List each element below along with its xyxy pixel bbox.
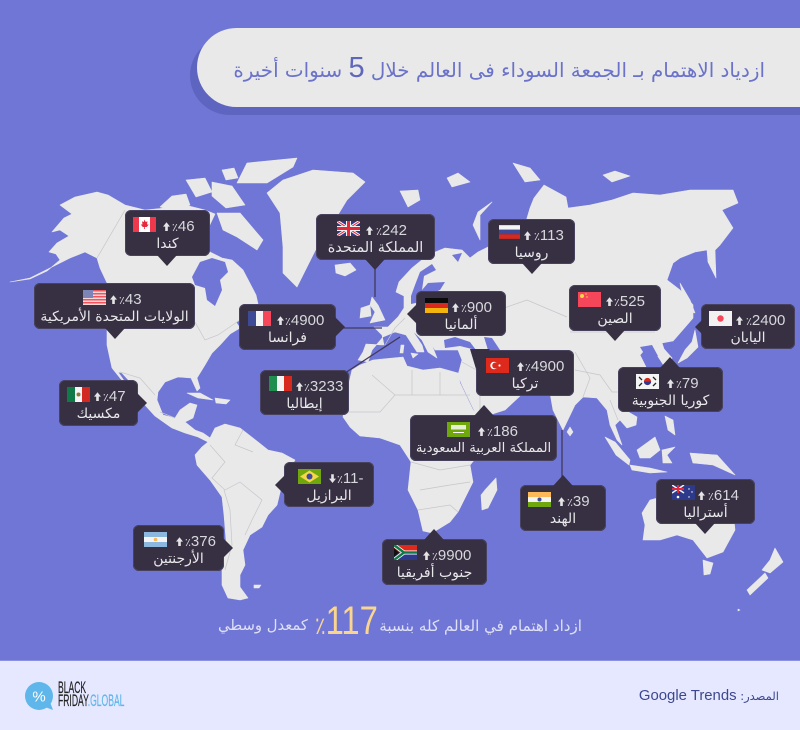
title bar (197, 28, 800, 107)
logo wordmark: FRIDAY.GLOBAL (58, 692, 124, 710)
Caspian Sea (484, 337, 500, 350)
flag: Russia (499, 225, 520, 239)
source text: المصدر: Google Trends (639, 688, 779, 704)
callout: Saudi Arabia: المملكة العربية السعودية (416, 441, 551, 456)
callout: Mexico (59, 380, 138, 426)
flag: Canada (133, 217, 156, 232)
flag: France (248, 311, 271, 326)
callout: Italy: إيطاليا (286, 396, 323, 412)
callout: United Kingdom (316, 214, 435, 260)
islands (187, 163, 783, 611)
callout: South Africa: جنوب أفريقيا (397, 565, 472, 581)
flag: Brazil (298, 469, 321, 484)
logo (25, 679, 124, 710)
flag: Germany (425, 298, 448, 313)
callout: USA (34, 283, 195, 329)
logo wordmark: BLACK (58, 679, 86, 697)
flag: Australia (672, 485, 695, 500)
flag: Turkey (486, 358, 509, 373)
flag: Japan (709, 311, 732, 326)
callout: South Africa (382, 539, 487, 585)
callout: Australia: ٪614 (708, 487, 739, 504)
summary text (218, 599, 582, 643)
callout: India: الهند (550, 511, 576, 527)
flag: United Kingdom (337, 221, 360, 236)
callout: United Kingdom: المملكة المتحدة (328, 240, 423, 256)
summary: first part: ازداد اهتمام في العالم كله بنسبة (379, 617, 582, 635)
callout: China: الصين (597, 311, 633, 327)
Greenland (267, 170, 365, 287)
flag: USA (83, 290, 106, 305)
header bar shadow (190, 36, 800, 115)
callout: Saudi Arabia (410, 415, 557, 461)
callout: Brazil: ٪11- (337, 470, 364, 487)
callout: Mexico: ٪47 (103, 388, 126, 405)
callout: South Korea: ٪79 (676, 375, 699, 392)
callout: France: ٪4900 (285, 312, 324, 329)
logo wordmark (58, 679, 124, 710)
flag: India (528, 492, 551, 507)
Hudson Bay (192, 258, 228, 306)
footer (0, 660, 800, 730)
callout: China: ٪525 (614, 293, 645, 310)
callout: Argentina: ٪376 (185, 533, 216, 550)
callout: Australia (656, 479, 755, 524)
flag: South Africa (394, 545, 417, 560)
callout: Mexico: مكسيك (77, 406, 120, 422)
Baltic Sea (411, 264, 445, 304)
callout: France: فرانسا (268, 330, 307, 346)
callout: Russia (488, 219, 575, 264)
South America (195, 424, 295, 600)
callout: Germany: ألمانيا (445, 317, 477, 333)
callout: Japan: ٪2400 (746, 312, 785, 329)
summary: last part: كمعدل وسطي (218, 617, 308, 634)
callout: Turkey: تركيا (512, 376, 538, 392)
callout: South Korea: كوريا الجنوبية (632, 393, 709, 409)
Africa (343, 357, 497, 533)
callout: Australia: أستراليا (683, 505, 728, 521)
Eurasia (358, 185, 738, 445)
callout: USA: الولايات المتحدة الأمريكية (40, 309, 189, 325)
flag: South Korea (636, 374, 659, 389)
Arctic islands (160, 158, 356, 276)
callout: Argentina (133, 525, 224, 571)
flag: Mexico (67, 387, 90, 402)
North America (10, 192, 258, 442)
callout: South Korea (618, 367, 723, 412)
callout: Russia: روسيا (515, 245, 548, 261)
callout: India: ٪39 (567, 493, 590, 510)
Sea of Japan coast (640, 345, 658, 360)
flag: China (578, 292, 601, 307)
callout: Canada (125, 210, 210, 256)
callout: Germany (416, 291, 506, 336)
country borders (97, 210, 655, 570)
callout: Canada: كندا (156, 236, 179, 252)
callout: Brazil (284, 462, 374, 507)
callout: Turkey (476, 350, 574, 396)
callout: China (569, 285, 661, 331)
callout: France (239, 304, 336, 350)
big number 117 percent: ٪117 (315, 599, 378, 643)
callout: India (520, 485, 606, 531)
callout: Turkey: ٪4900 (525, 358, 564, 375)
flag: Saudi Arabia (447, 422, 470, 437)
callout: Italy (260, 370, 349, 415)
callout: Japan (701, 304, 795, 349)
flag: Argentina (144, 532, 167, 547)
logo icon: % (32, 688, 46, 706)
callout: Japan: اليابان (730, 330, 766, 346)
leader lines (340, 265, 562, 478)
callout: Argentina: الأرجنتين (153, 551, 204, 567)
inland water (192, 253, 658, 360)
callout: Canada: ٪46 (172, 218, 195, 235)
title text: ازدياد الاهتمام بـ الجمعة السوداء فى العالم خلال 5 سنوات أخيرة (233, 52, 765, 84)
callout: South Africa: ٪9900 (432, 547, 471, 564)
callout: Italy: ٪3233 (304, 378, 343, 395)
Black Sea (444, 337, 476, 350)
callout: Brazil: البرازيل (306, 488, 352, 504)
callout: United Kingdom: ٪242 (376, 222, 407, 239)
land masses (10, 158, 783, 611)
logo icon (25, 682, 53, 710)
flag: Italy (269, 376, 292, 391)
callout: USA: ٪43 (119, 291, 142, 308)
callout: Russia: ٪113 (534, 227, 564, 244)
White Sea (452, 253, 462, 262)
callout: Saudi Arabia: ٪186 (487, 423, 518, 440)
callout: Germany: ٪900 (461, 299, 492, 316)
